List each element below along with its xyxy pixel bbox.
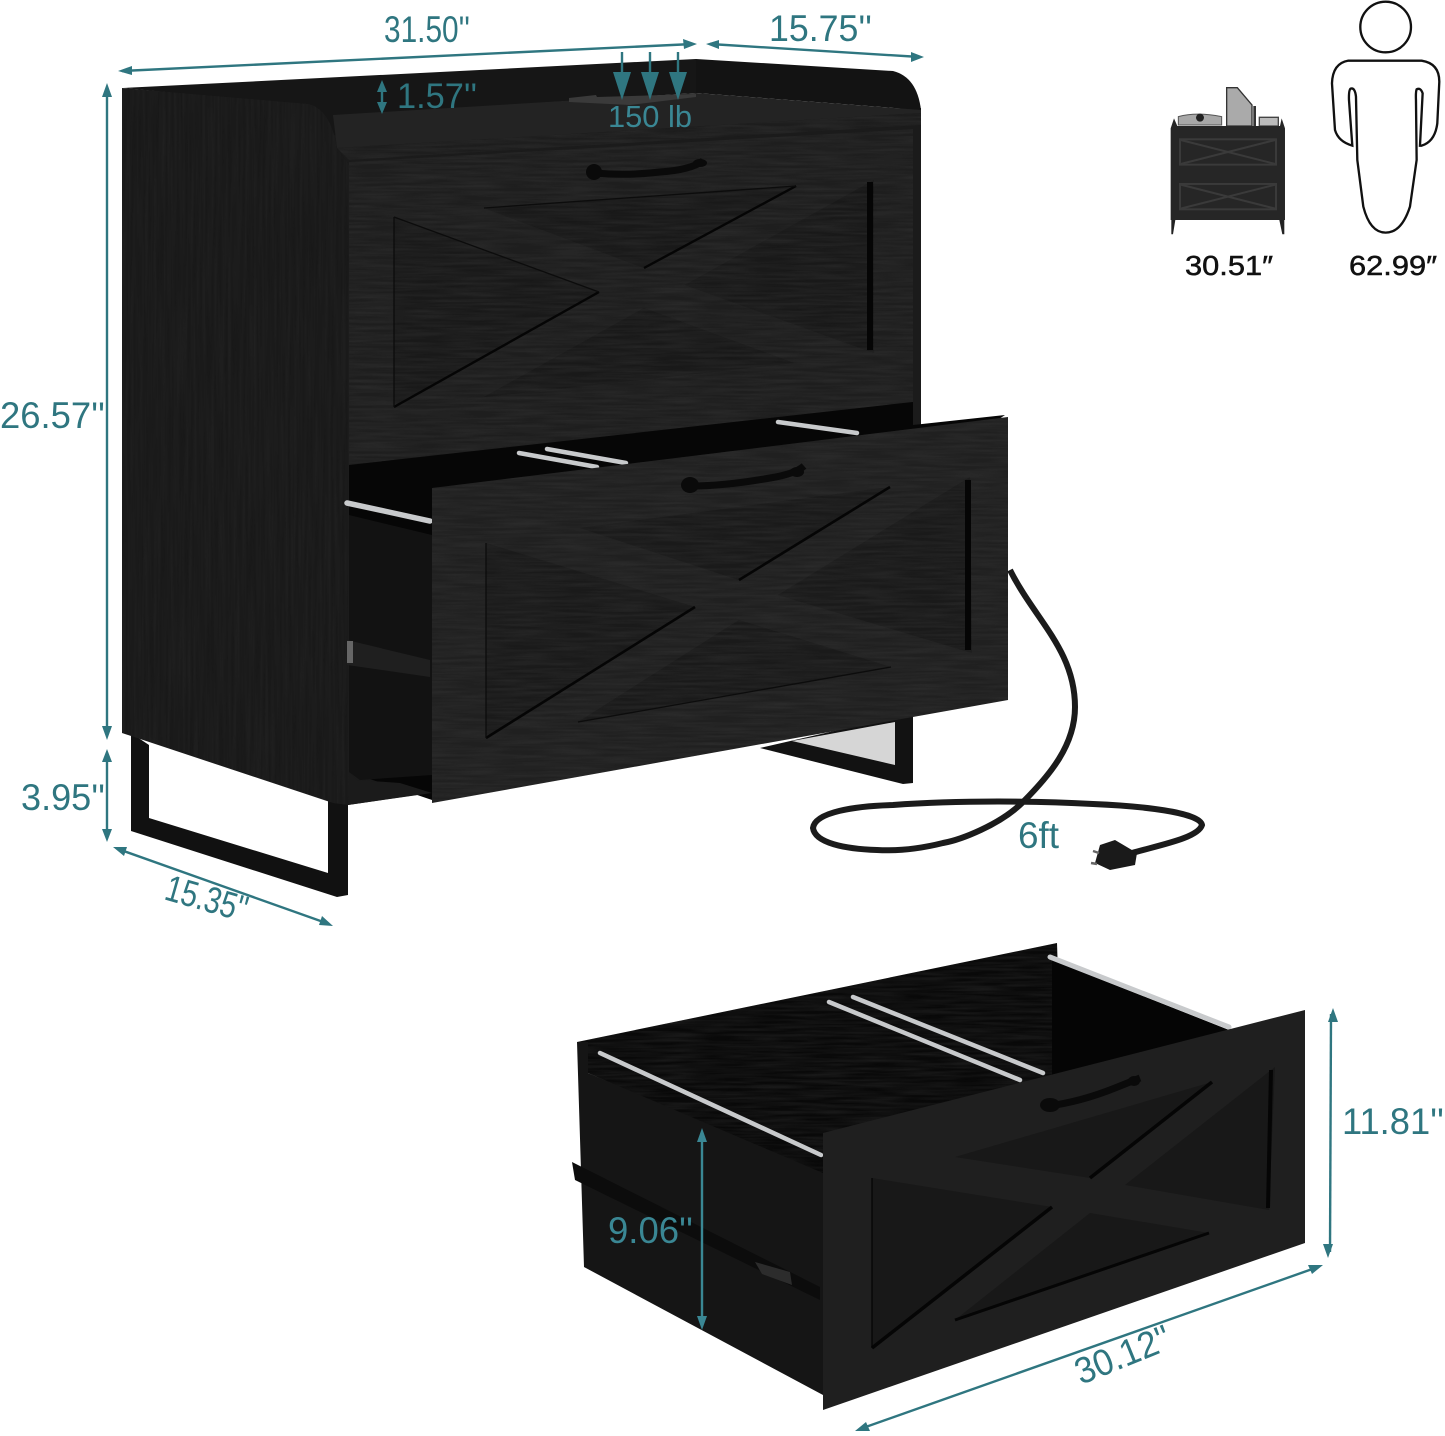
hanging rails xyxy=(600,957,1229,1155)
dimension: interior height 9.06: 9.06'' xyxy=(608,1210,693,1251)
cabinet bottom board xyxy=(348,772,432,805)
charging station strip xyxy=(569,94,696,105)
label: cabinet height 30.51: 30.51″ xyxy=(1185,250,1273,281)
drawer left outer wall xyxy=(577,1042,823,1395)
drawer right interior wall xyxy=(1052,960,1229,1085)
weight capacity arrows xyxy=(613,52,687,100)
hanging rails in cavity xyxy=(347,422,857,521)
dimension: drawer height 11.81: 11.81'' xyxy=(1342,1101,1444,1142)
lower open drawer xyxy=(432,417,1008,803)
dimension: height 26.57: 26.57'' xyxy=(0,395,105,436)
dimension: drawer depth 30.12 xyxy=(855,1265,1323,1431)
open cavity xyxy=(349,402,1005,800)
file drawer illustration xyxy=(572,943,1305,1410)
main cabinet illustration xyxy=(122,59,1008,897)
drawer front grooves xyxy=(872,1070,1271,1348)
upper drawer handle xyxy=(586,159,707,180)
metal legs xyxy=(131,717,913,897)
drawer back panel xyxy=(577,943,1058,1177)
power cord and plug xyxy=(813,570,1202,870)
lower drawer handle xyxy=(681,466,804,493)
drawer front panel recesses xyxy=(872,1067,1275,1348)
cabinet side panel xyxy=(122,88,349,805)
dimension: leg height 3.95: 3.95'' xyxy=(21,777,105,818)
dimension: height 26.57 xyxy=(0,83,112,740)
label: person height 62.99: 62.99″ xyxy=(1349,250,1437,281)
dimension: depth 15.75 xyxy=(706,8,924,62)
weight capacity label: 150 lb xyxy=(608,99,692,134)
upper drawer face xyxy=(349,129,913,465)
drawer slide rail xyxy=(572,1162,820,1300)
thumbnail legs xyxy=(1171,220,1284,234)
height comparison: person outline xyxy=(1332,2,1439,233)
dimension: width 31.50: 31.50'' xyxy=(384,9,470,50)
lower drawer face xyxy=(432,417,1008,803)
dimension: drawer depth 30.12: 30.12'' xyxy=(1069,1317,1177,1392)
upper drawer xyxy=(349,129,913,465)
upper top band xyxy=(337,113,921,160)
thumbnail items on top xyxy=(1178,114,1222,125)
dimension: interior height 9.06 xyxy=(608,1128,707,1330)
upper drawer grooves xyxy=(394,182,870,407)
dimension: leg height 3.95 xyxy=(21,749,112,842)
height comparison: cabinet thumbnail xyxy=(1171,88,1285,234)
right gallery rail xyxy=(696,59,921,110)
dimension: gallery height 1.57: 1.57'' xyxy=(397,77,477,116)
lower drawer grooves xyxy=(486,480,968,738)
thumbnail drawers xyxy=(1180,139,1276,209)
drawer side interior xyxy=(349,515,432,780)
dimension: leg depth 15.35 xyxy=(113,847,333,930)
plug xyxy=(1091,840,1137,870)
drawer front face xyxy=(823,1010,1305,1410)
top surface xyxy=(333,93,921,148)
drawer slide xyxy=(347,640,430,677)
dimension: drawer height 11.81 xyxy=(1323,1008,1444,1258)
cord length label: 6ft xyxy=(1018,815,1060,856)
dimension: width 31.50 xyxy=(118,9,697,75)
drawer front handle xyxy=(1040,1076,1140,1112)
cabinet front and carcass xyxy=(333,108,921,805)
dimension: depth 15.75: 15.75'' xyxy=(769,8,872,49)
upper drawer panel recesses xyxy=(394,180,874,407)
back gallery rail xyxy=(123,59,696,135)
lower drawer panel recesses xyxy=(486,477,972,738)
thumbnail cabinet body xyxy=(1171,118,1285,220)
dimension: leg depth 15.35: 15.35'' xyxy=(161,867,253,930)
